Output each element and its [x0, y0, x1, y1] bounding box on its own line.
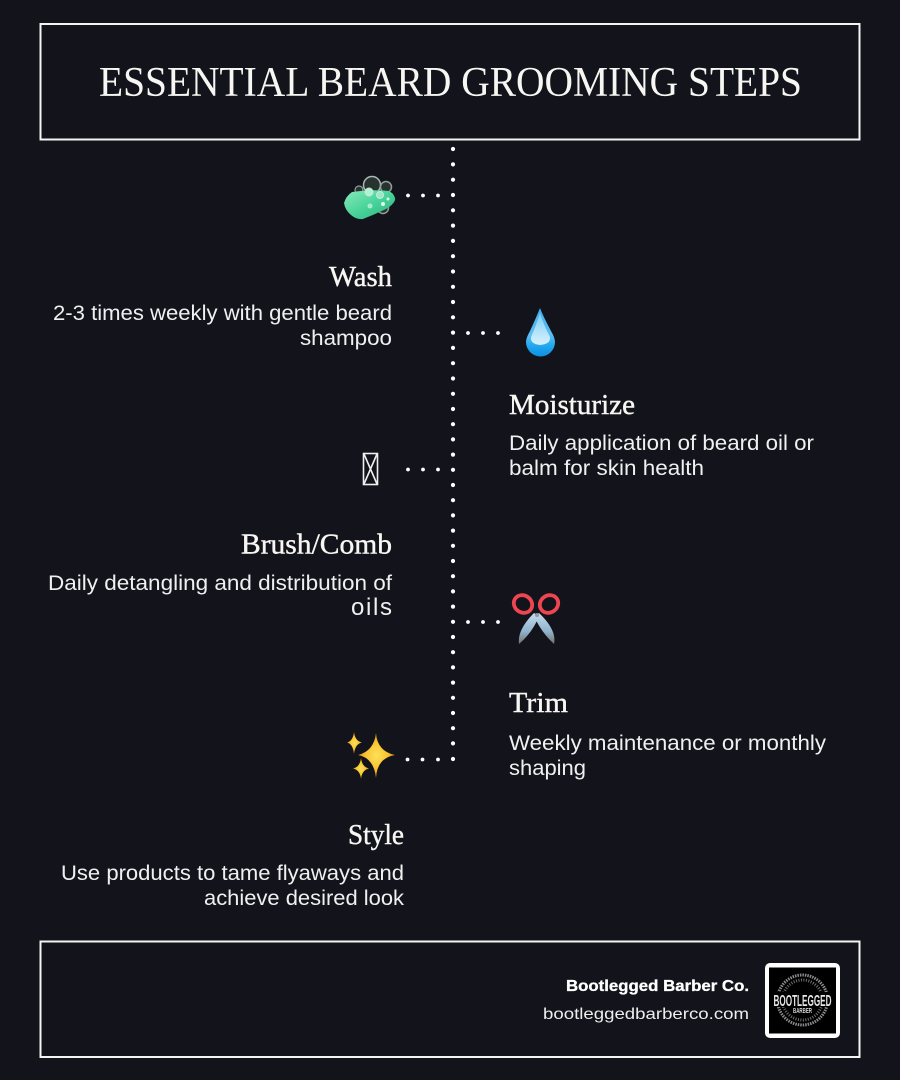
website url: bootleggedbarberco.com: [543, 1006, 749, 1023]
heading: style: Style: [348, 820, 404, 851]
step 1: wash: [53, 176, 440, 350]
title banner: ESSENTIAL BEARD GROOMING STEPS: [99, 60, 802, 106]
icon: scissors: [510, 592, 562, 644]
step 2: moisturize: [466, 308, 814, 480]
title banner: [40, 24, 860, 140]
text: moisturize description: balm for skin health: [509, 457, 704, 480]
connector: style: [406, 758, 440, 761]
text: trim description: Weekly maintenance or monthly: [509, 732, 827, 755]
connector: trim: [466, 620, 500, 624]
footer panel: [40, 942, 860, 1057]
connector: brush/comb: [406, 468, 440, 471]
text: style description: Use products to tame flyaways and: [61, 862, 404, 885]
text: style description: [61, 862, 405, 910]
text: brush/comb description: [48, 572, 392, 621]
text: wash description: [53, 302, 392, 350]
logo badge: [765, 963, 840, 1038]
logo badge: BOOTLEGGED: [774, 993, 832, 1010]
step 5: style: [61, 732, 440, 910]
text: wash description: 2-3 times weekly with gentle beard: [53, 302, 392, 325]
step 4: trim: [466, 592, 827, 780]
text: trim description: [509, 732, 827, 780]
heading: brush/comb: Brush/Comb: [241, 530, 392, 560]
text: style description: achieve desired look: [204, 887, 405, 910]
heading: wash: Wash: [329, 262, 392, 293]
brand name: Bootlegged Barber Co.: [566, 978, 749, 995]
heading: moisturize: Moisturize: [509, 390, 635, 421]
text: brush/comb description: oils: [351, 594, 392, 621]
icon: sparkles: [347, 732, 395, 779]
text: wash description: shampoo: [300, 327, 392, 350]
text: trim description: shaping: [509, 757, 586, 780]
text: moisturize description: [509, 432, 814, 480]
connector: wash: [406, 194, 440, 197]
heading: trim: Trim: [509, 688, 568, 719]
timeline dotted spine: [451, 147, 455, 761]
text: moisturize description: Daily application of beard oil or: [509, 432, 814, 455]
icon: water drop: [526, 308, 555, 356]
connector: moisturize: [466, 331, 500, 335]
text: brush/comb description: Daily detangling and distribution of: [48, 572, 392, 595]
icon: missing glyph box: [364, 454, 378, 484]
icon: soap with bubbles: [344, 176, 395, 219]
logo badge: BARBER: [793, 1008, 812, 1015]
step 3: brush/comb: [48, 454, 440, 621]
